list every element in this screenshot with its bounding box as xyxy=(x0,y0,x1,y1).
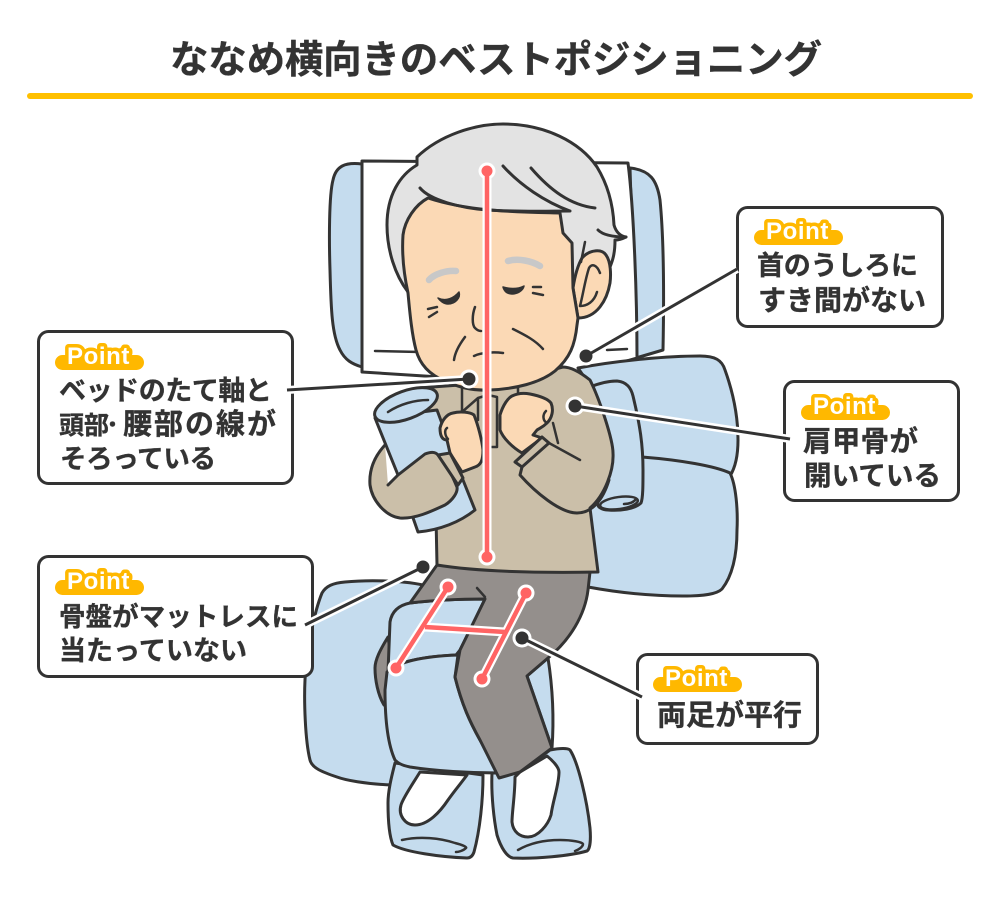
sweater: right sleeve crease xyxy=(549,423,580,460)
callout text: そろっている xyxy=(60,437,216,476)
callout: neck xyxy=(738,208,942,326)
sleeve cuff: left xyxy=(438,453,463,485)
red vertical axis line xyxy=(478,162,496,566)
callout text: 当たっていない xyxy=(59,629,247,668)
callout box xyxy=(38,332,292,484)
hand: right fist thumb line xyxy=(543,411,547,423)
mouth xyxy=(474,352,503,356)
callout box xyxy=(738,208,942,326)
wrinkles xyxy=(428,287,543,360)
callout text: 骨盤がマットレスに xyxy=(59,595,298,634)
hand: left fist thumb line xyxy=(445,428,448,439)
callout: legs parallel xyxy=(638,654,818,744)
cushion: back support upper xyxy=(578,356,738,476)
callout box xyxy=(784,382,958,500)
eyebrows xyxy=(429,271,456,280)
hair: fringe lines xyxy=(420,166,626,237)
hair: back xyxy=(387,124,626,292)
foot wrap: right xyxy=(492,748,590,858)
callout text: ベッドのたて軸と xyxy=(59,369,272,408)
cushion: back support lower xyxy=(588,457,737,596)
callout text xyxy=(803,419,941,493)
point badge: Point xyxy=(813,393,876,420)
leader: pelvis xyxy=(305,560,430,625)
trousers: fold tick xyxy=(477,588,485,597)
eyes closed xyxy=(438,292,459,304)
hand: right fist xyxy=(500,393,552,453)
callout text: 首のうしろに xyxy=(757,244,918,283)
callout text: ･ xyxy=(106,405,119,442)
cushion: large left pillow under hips xyxy=(305,581,430,785)
callout text: すき間がない xyxy=(758,279,926,319)
callout text: 両足が平行 xyxy=(657,692,802,734)
face xyxy=(403,198,578,390)
callout text xyxy=(757,244,926,319)
trousers: hips and leg xyxy=(410,565,590,778)
point badge: Point xyxy=(766,218,829,245)
leader: legs parallel xyxy=(512,628,642,697)
nose xyxy=(473,307,481,331)
callout text: 肩甲骨が xyxy=(803,419,918,460)
callout text: 腰部の線が xyxy=(123,401,276,443)
pillow: blue head pillow xyxy=(329,164,664,367)
foot wrap: left xyxy=(388,763,483,858)
callout box xyxy=(38,556,312,676)
illustration: elderly man lying on side with cushions xyxy=(305,124,738,858)
red parallel legs H line xyxy=(388,578,534,688)
point badge: Point xyxy=(665,665,728,692)
sleeve: right arm lower edge xyxy=(520,467,609,513)
ear inner xyxy=(580,265,600,306)
hand: left fist xyxy=(440,412,483,472)
left roll cushion hugged by arm xyxy=(370,381,475,532)
sweater: torso xyxy=(395,367,613,572)
cheek fold xyxy=(513,329,543,349)
trousers: back leg knee xyxy=(375,637,395,705)
leader: shoulder blade xyxy=(566,396,790,439)
title: ななめ横向きのベストポジショニング xyxy=(170,29,822,85)
head xyxy=(387,124,626,390)
callout text: 開いている xyxy=(804,453,941,493)
leader: head and waist line xyxy=(287,370,478,390)
callout box xyxy=(638,654,818,744)
point badge: Point xyxy=(67,568,130,595)
ear xyxy=(573,251,611,318)
title underline xyxy=(27,93,973,99)
point badge: Point xyxy=(67,343,130,370)
cushion: between knees lower xyxy=(385,655,499,773)
callout: pelvis xyxy=(38,556,312,676)
cushion: small rolled towel behind back xyxy=(590,381,643,512)
callout text: 頭部 xyxy=(59,406,109,442)
callout: head and waist line xyxy=(38,332,292,484)
pillow: white pillow cover xyxy=(362,161,637,380)
sleeve: left arm xyxy=(370,445,457,518)
sweater: collar xyxy=(462,385,518,447)
hair: sideburn line xyxy=(581,242,585,262)
callout text xyxy=(59,369,276,476)
cushion: between knees upper xyxy=(388,599,485,672)
cushion: sliver between legs xyxy=(527,658,553,748)
sleeve cuff: right xyxy=(515,437,549,467)
callout text xyxy=(59,595,298,668)
callout: shoulder blade xyxy=(784,382,958,500)
leader lines with dots xyxy=(287,269,790,697)
leader: neck xyxy=(576,269,737,366)
alignment lines in red xyxy=(388,162,534,688)
